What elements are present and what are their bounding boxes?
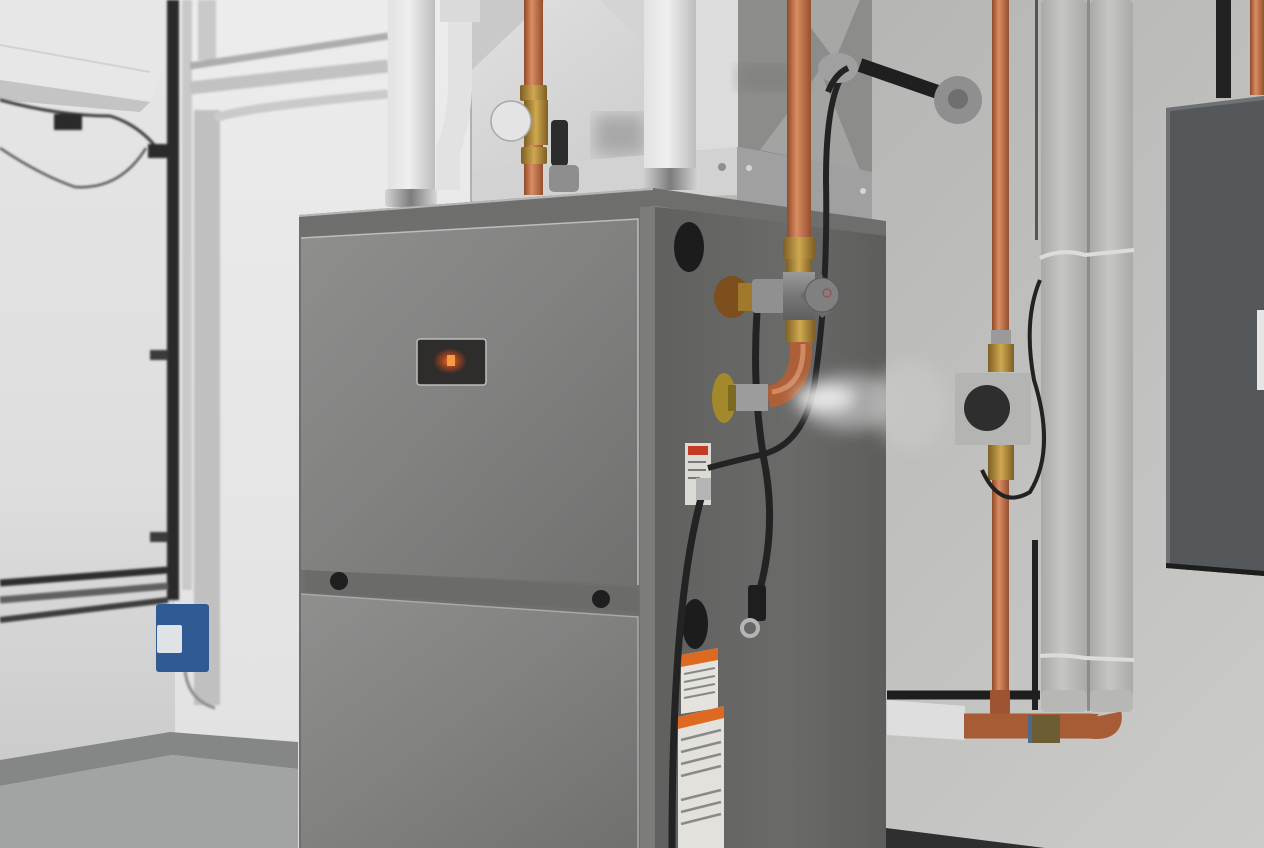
lower front panel xyxy=(301,594,640,848)
warning labels xyxy=(678,443,724,848)
control strip xyxy=(305,570,638,612)
electrical junction box xyxy=(955,373,1031,445)
escaping gas spray xyxy=(795,360,948,450)
duct flange xyxy=(472,147,737,205)
right wall copper pipe xyxy=(988,0,1014,698)
electrical panel xyxy=(1166,0,1264,576)
right black cable xyxy=(982,280,1044,498)
black flexible hoses behind fitting xyxy=(708,68,848,600)
left wall cabinet xyxy=(0,0,163,112)
left wall wiring and conduits xyxy=(0,0,388,708)
upper front panel xyxy=(301,219,640,585)
status indicator xyxy=(417,339,486,385)
front hose and clamp xyxy=(672,478,766,848)
gas valve and copper riser xyxy=(491,0,579,195)
lower copper return pipe xyxy=(887,690,1133,743)
wall penetration fitting and black pipe xyxy=(818,53,982,124)
gray vertical pipes xyxy=(1032,0,1134,711)
blue junction box xyxy=(156,604,209,672)
furnace cabinet xyxy=(299,188,886,848)
sheet metal duct xyxy=(472,0,872,222)
main copper gas line with fitting xyxy=(712,0,839,423)
side knockout holes xyxy=(674,222,704,272)
white vent pipes xyxy=(385,0,699,207)
